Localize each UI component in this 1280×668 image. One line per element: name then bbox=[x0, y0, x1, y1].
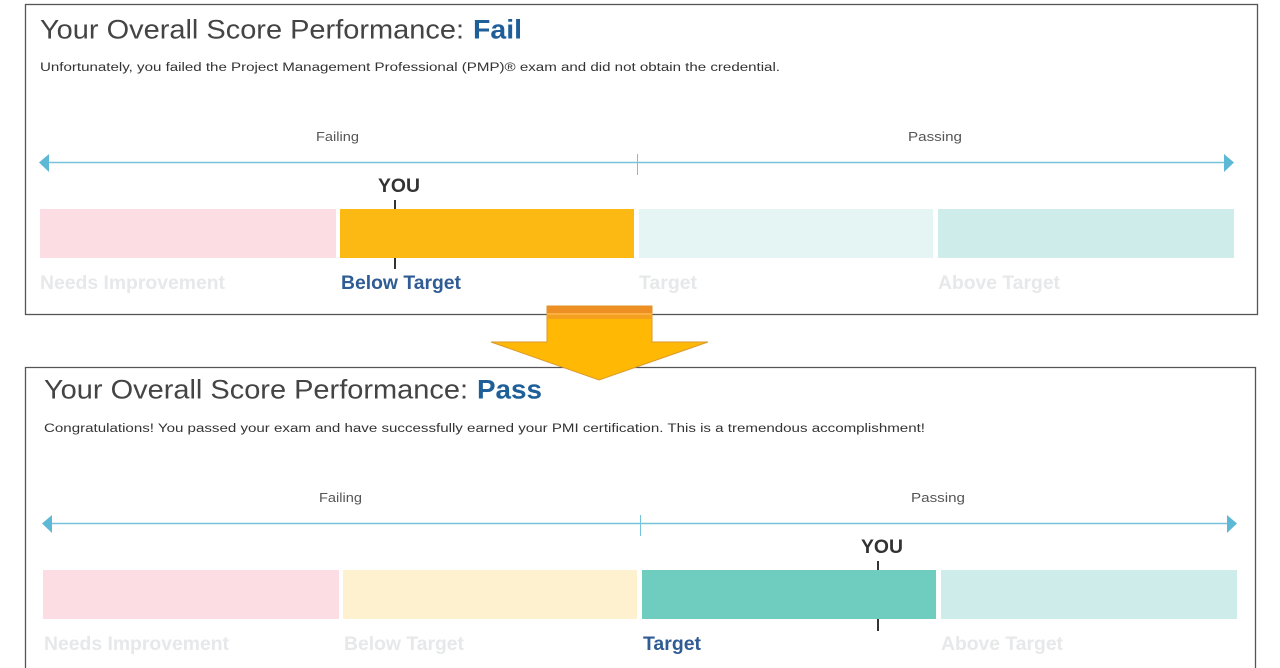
segment: below target bbox=[343, 570, 637, 619]
description: fail message: Unfortunately, you failed the Project Management Professional (PMP)® exam and did not obtain the credential. bbox=[40, 62, 780, 74]
label: passing zone: Passing bbox=[908, 129, 962, 144]
heading: fail result: Your Overall Score Performance: bbox=[40, 14, 464, 44]
panel: passing score report bbox=[26, 368, 1256, 668]
marker: you: YOU bbox=[861, 537, 903, 558]
label: below target active: Below Target bbox=[341, 273, 462, 294]
heading: fail result: Fail bbox=[473, 14, 522, 44]
label: needs improvement: Needs Improvement bbox=[44, 634, 230, 655]
marker: you: YOU bbox=[378, 176, 420, 197]
segment: above target bbox=[941, 570, 1237, 619]
segment: below target active bbox=[340, 209, 634, 258]
marker: you bbox=[861, 537, 903, 631]
description: pass message: Congratulations! You passed your exam and have successfully earned your PMI certification. This is a tremendous accomplishment! bbox=[44, 423, 925, 435]
segment: needs improvement bbox=[40, 209, 336, 258]
label: failing zone: Failing bbox=[319, 490, 362, 505]
panel: failing score report bbox=[26, 4, 1258, 314]
arrow: fail to pass bbox=[491, 306, 708, 380]
label: target: Target bbox=[639, 273, 698, 294]
label: passing zone: Passing bbox=[911, 490, 965, 505]
marker: you bbox=[378, 176, 420, 269]
scale arrow: failing to passing bbox=[42, 515, 1237, 536]
label: needs improvement: Needs Improvement bbox=[40, 273, 226, 294]
scale arrow: failing to passing bbox=[39, 154, 1234, 175]
label: above target: Above Target bbox=[938, 273, 1061, 294]
label: failing zone: Failing bbox=[316, 129, 359, 144]
label: below target: Below Target bbox=[344, 634, 465, 655]
segment: above target bbox=[938, 209, 1234, 258]
segment: target active bbox=[642, 570, 936, 619]
label: target active: Target bbox=[643, 634, 702, 655]
heading: pass result: Your Overall Score Performance: bbox=[44, 374, 468, 404]
heading: pass result: Pass bbox=[477, 374, 542, 404]
segment: target bbox=[639, 209, 933, 258]
label: above target: Above Target bbox=[941, 634, 1064, 655]
segment: needs improvement bbox=[43, 570, 339, 619]
